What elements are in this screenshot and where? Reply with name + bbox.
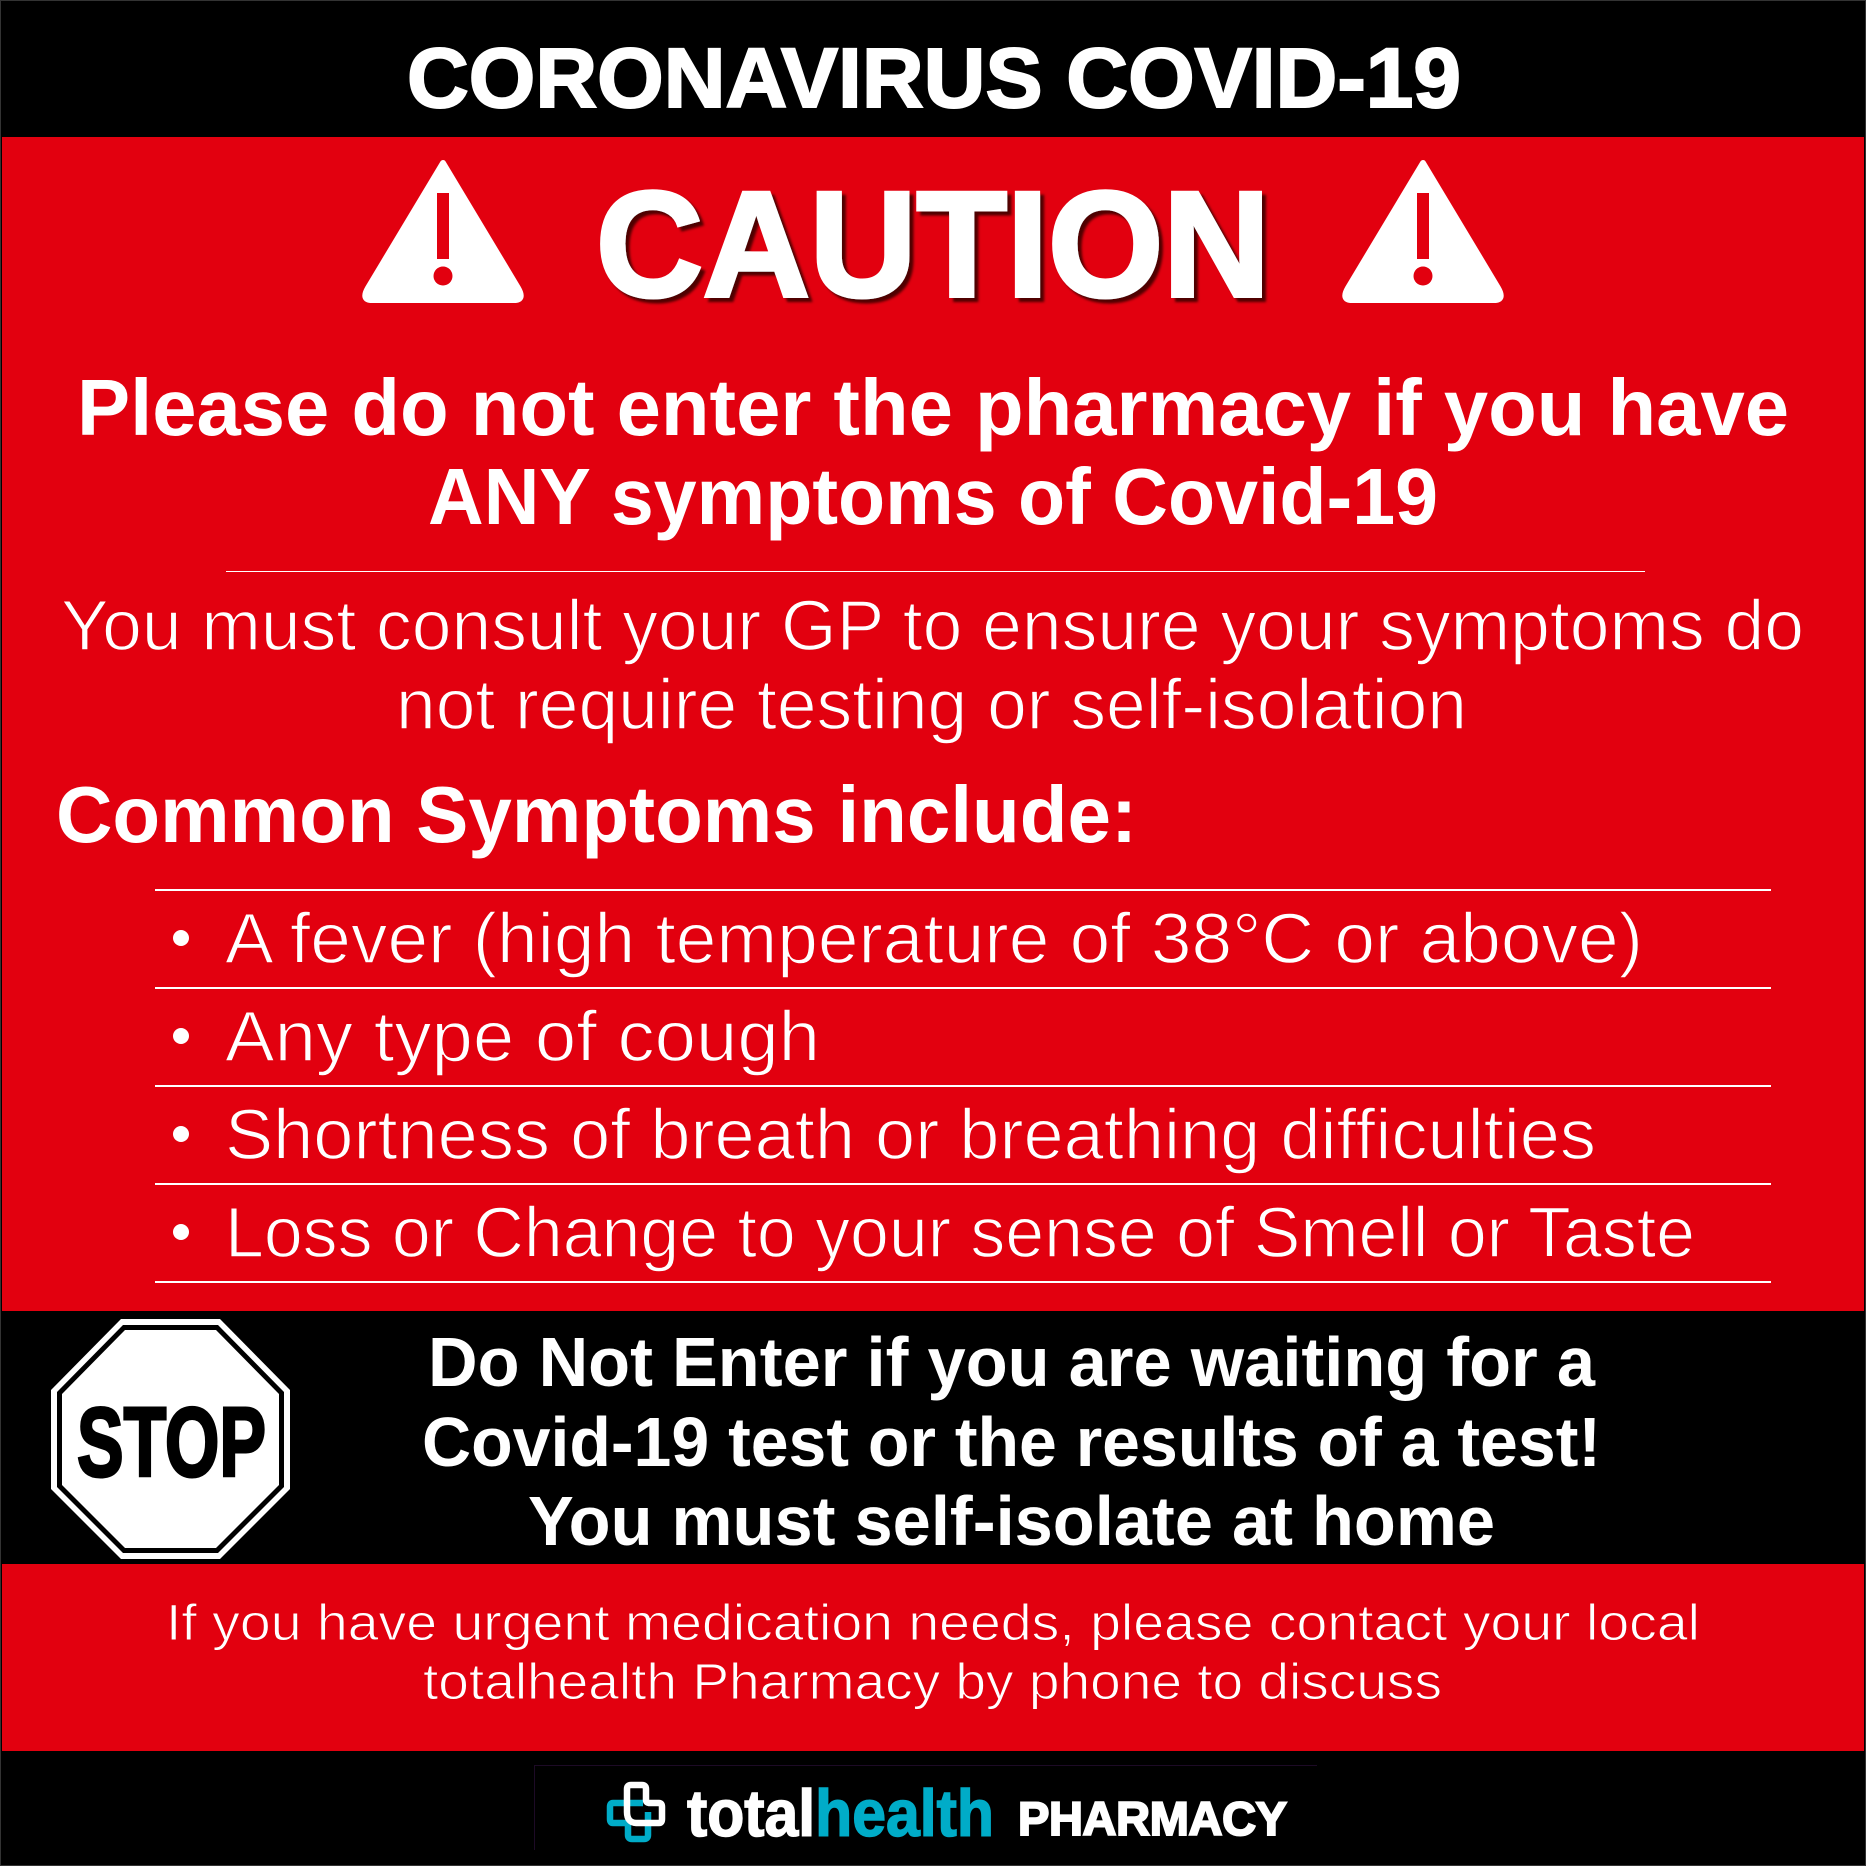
logo: totalhealth pharmacy: [610, 1776, 1287, 1850]
panel: main caution area: [2, 137, 1864, 1311]
symptom: smell or taste: Loss or Change to your sense of Smell or Taste: [225, 1194, 1695, 1273]
heading: caution: CAUTION: [596, 160, 1270, 328]
text block: urgent medication note: If you have urgent medication needs, please contact your local: [166, 1594, 1700, 1651]
symptoms list: [155, 889, 1771, 1283]
text block: do not enter warning: [77, 363, 1789, 541]
panel: urgent medication: [2, 1564, 1864, 1751]
text block: do not enter if waiting: Do Not Enter if you are waiting for a: [428, 1323, 1596, 1401]
text block: do not enter warning: Please do not enter the pharmacy if you have: [77, 363, 1789, 452]
icon: stop sign: STOP: [77, 1387, 266, 1497]
text block: consult your GP: [61, 587, 1804, 745]
text block: urgent medication note: totalhealth Pharmacy by phone to discuss: [423, 1653, 1442, 1710]
logo descriptor: PHARMACY: [1018, 1792, 1287, 1845]
text block: urgent medication note: [166, 1594, 1700, 1710]
title: CORONAVIRUS COVID-19: [407, 31, 1461, 125]
icon: stop sign: [51, 1319, 290, 1559]
text block: do not enter warning: ANY symptoms of Covid-19: [428, 452, 1438, 541]
panel: footer: [1, 1751, 1865, 1865]
logo wordmark: totalhealth: [687, 1776, 994, 1850]
icon: cross logo: [610, 1785, 662, 1839]
panel: header band: [1, 1, 1865, 137]
text block: do not enter if waiting: You must self-isolate at home: [528, 1482, 1495, 1560]
text block: do not enter if waiting: [422, 1323, 1601, 1560]
text block: consult your GP: not require testing or self-isolation: [396, 666, 1467, 745]
heading: common symptoms: Common Symptoms include:: [56, 770, 1137, 859]
symptom: breath: Shortness of breath or breathing difficulties: [225, 1096, 1596, 1175]
text block: do not enter if waiting: Covid-19 test or the results of a test!: [422, 1403, 1601, 1481]
icon: left warning triangle: [365, 163, 521, 300]
icon: right warning triangle: [1345, 163, 1501, 300]
panel: stop band: [1, 1311, 1865, 1564]
symptom: cough: Any type of cough: [225, 998, 820, 1077]
symptom: fever: A fever (high temperature of 38°C or above): [225, 900, 1643, 979]
text block: consult your GP: You must consult your GP to ensure your symptoms do: [61, 587, 1804, 666]
